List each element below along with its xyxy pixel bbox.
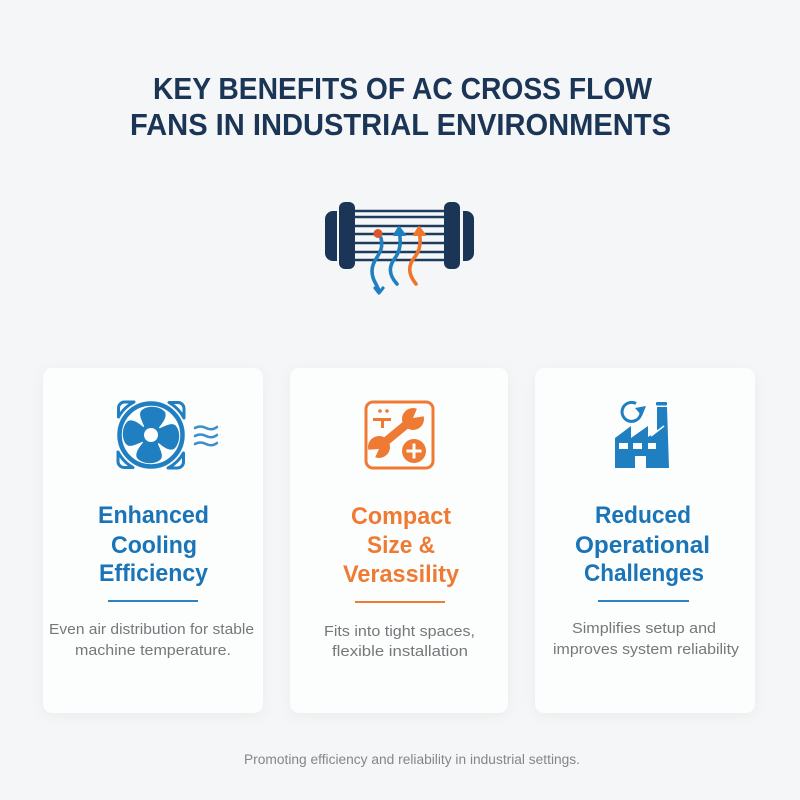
icon: cross flow fan (325, 202, 474, 293)
description: Simplifies setup and (572, 620, 716, 637)
heading: Reduced (595, 502, 691, 529)
panel: reduced operational challenges (535, 368, 755, 716)
description: flexible installation (332, 643, 468, 660)
heading: Verassility (343, 561, 460, 588)
footer text: Promoting efficiency and reliability in industrial settings. (244, 752, 580, 767)
heading (343, 503, 460, 588)
heading: Compact (351, 503, 451, 530)
description: improves system reliability (553, 641, 740, 658)
icon: factory (615, 402, 669, 468)
description (49, 621, 254, 659)
heading: Challenges (584, 560, 704, 587)
title: FANS IN INDUSTRIAL ENVIRONMENTS (130, 108, 671, 142)
heading (98, 502, 209, 587)
title (130, 72, 671, 142)
panel: enhanced cooling efficiency (43, 368, 263, 716)
heading: Operational (575, 532, 710, 559)
heading: Cooling (111, 532, 197, 559)
heading: Size & (367, 532, 435, 559)
icon: fan (118, 402, 217, 468)
description: machine temperature. (75, 642, 231, 659)
icon: wrench and plus (365, 402, 433, 468)
heading: Enhanced (98, 502, 209, 529)
panel: compact size and versatility (290, 368, 508, 716)
description: Even air distribution for stable (49, 621, 254, 638)
description (324, 623, 475, 660)
description: Fits into tight spaces, (324, 623, 475, 640)
heading (575, 502, 710, 587)
title: KEY BENEFITS OF AC CROSS FLOW (153, 72, 652, 106)
description (553, 620, 740, 658)
heading: Efficiency (99, 560, 209, 587)
